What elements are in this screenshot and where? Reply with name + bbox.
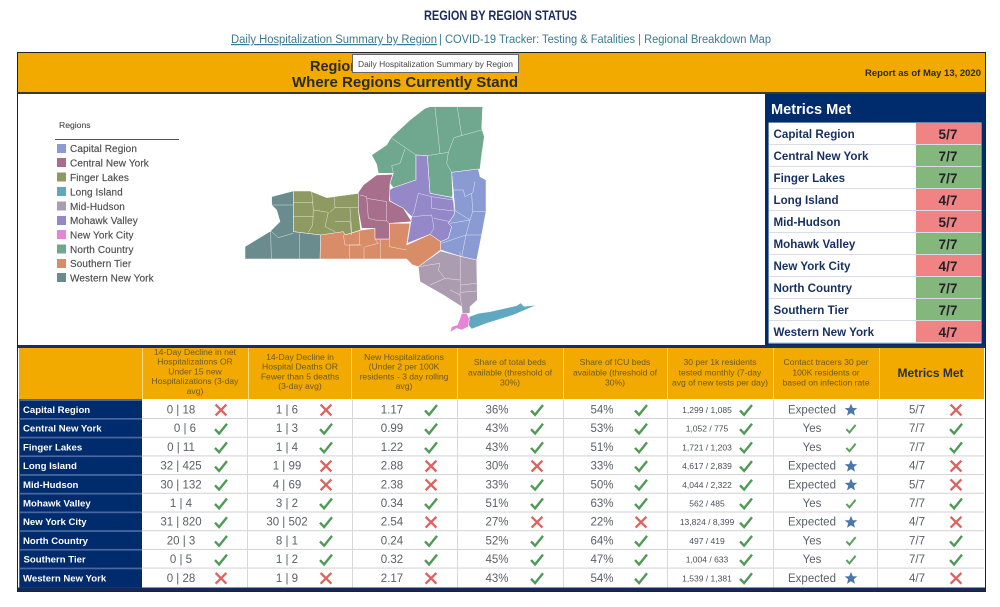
- region: Finger Lakes: [293, 191, 361, 235]
- row: Western New York: 1 | 9: [276, 573, 298, 585]
- row: Capital Region: Capital Region: [774, 128, 855, 141]
- row: Southern Tier: 0.32: [381, 554, 403, 566]
- row: Capital Region: 54%: [590, 404, 614, 416]
- header banner: Region: [310, 59, 359, 75]
- row: Finger Lakes: 43%: [485, 442, 509, 454]
- row: Capital Region: Expected: [788, 404, 836, 416]
- row: New York City: [20, 513, 984, 531]
- panel heading: Metrics Met: [771, 102, 851, 118]
- row: Mid-Hudson: 50%: [590, 479, 614, 491]
- row: Western New York: [769, 321, 981, 342]
- row: Mid-Hudson: 33%: [485, 479, 509, 491]
- panel: metrics met summary: [765, 94, 986, 346]
- row: Capital Region: 1.17: [381, 404, 403, 416]
- row: Finger Lakes: [769, 167, 981, 188]
- row: Mid-Hudson: 4 | 69: [273, 479, 301, 491]
- row: Mohawk Valley: 0.34: [381, 498, 404, 510]
- column heading: total beds: Share of total beds: [474, 357, 546, 367]
- region: Mohawk Valley: [389, 155, 455, 243]
- row: Western New York: [20, 569, 961, 587]
- row: Central New York: [20, 420, 984, 438]
- row: Long Island: 1 | 99: [273, 461, 301, 473]
- region: Long Island: [468, 303, 537, 329]
- legend: North Country: [70, 245, 134, 256]
- row: Mohawk Valley: Mohawk Valley: [23, 498, 91, 510]
- column heading: hospital deaths: Hospital Deaths OR: [262, 362, 338, 372]
- region: New York City: [450, 313, 469, 332]
- table body: [19, 399, 984, 588]
- row: Mid-Hudson: 4,044 / 2,322: [682, 480, 732, 490]
- navigation links: Daily Hospitalization Summary by Region: [231, 32, 437, 46]
- column heading: ICU beds: 30%): [605, 378, 625, 388]
- row: Southern Tier: Yes: [803, 554, 822, 566]
- legend: Southern Tier: [70, 259, 132, 270]
- row: Long Island: 4,617 / 2,839: [682, 461, 732, 471]
- row: Central New York: 7/7: [939, 149, 957, 164]
- row: Mohawk Valley: 1 | 4: [170, 498, 193, 510]
- column heading: ICU beds: available (threshold of: [573, 367, 658, 377]
- row: Finger Lakes: Finger Lakes: [23, 442, 82, 453]
- column heading: new hospitalizations: New Hospitalizations: [364, 352, 444, 362]
- row: Western New York: 4/7: [909, 573, 925, 585]
- row: Southern Tier: 7/7: [939, 303, 957, 318]
- row: North Country: 8 | 1: [276, 535, 298, 547]
- row: New York City: 4/7: [909, 517, 925, 529]
- row: Central New York: Yes: [803, 423, 822, 435]
- navigation links: [231, 32, 771, 46]
- legend: [55, 120, 179, 284]
- row: Western New York: 1,539 / 1,381: [682, 573, 732, 583]
- row: Mid-Hudson: 5/7: [909, 479, 925, 491]
- row: Southern Tier: [769, 299, 981, 320]
- row: Mohawk Valley: [20, 494, 984, 512]
- row: Central New York: 7/7: [909, 423, 925, 435]
- row: Long Island: Expected: [788, 461, 836, 473]
- row: North Country: North Country: [774, 282, 853, 295]
- column heading: hospitalizations decline: Hospitalizations (3-day: [152, 376, 239, 386]
- row: Long Island: [769, 189, 981, 210]
- row: Western New York: 43%: [485, 573, 509, 585]
- row: North Country: [769, 277, 981, 298]
- column heading: new hospitalizations: avg): [396, 381, 412, 391]
- row: Mid-Hudson: Mid-Hudson: [774, 216, 840, 229]
- row: Central New York: [769, 145, 981, 166]
- row: Southern Tier: 7/7: [909, 554, 925, 566]
- row: Long Island: [20, 457, 984, 475]
- legend: Central New York: [70, 158, 150, 170]
- row: Capital Region: [20, 401, 984, 419]
- navigation links: | COVID-19 Tracker: Testing & Fatalities | Regional Breakdown Map: [439, 32, 771, 46]
- tooltip: Daily Hospitalization Summary by Region: [358, 59, 513, 69]
- row: Finger Lakes: 0 | 11: [167, 442, 195, 454]
- row: New York City: 27%: [485, 517, 509, 529]
- row: North Country: 497 / 419: [689, 536, 725, 546]
- row: North Country: North Country: [23, 536, 89, 547]
- row: North Country: Yes: [803, 535, 822, 547]
- row: Mohawk Valley: [769, 233, 981, 254]
- row: Capital Region: Capital Region: [23, 405, 90, 416]
- row: Southern Tier: 1 | 2: [276, 554, 298, 566]
- row: New York City: 30 | 502: [266, 517, 308, 529]
- row: New York City: [769, 255, 981, 276]
- column heading: testing: tested monthly (7-day: [679, 367, 762, 377]
- row: Mohawk Valley: 7/7: [909, 498, 925, 510]
- legend: Long Island: [70, 188, 123, 198]
- column heading: hospital deaths: 14-Day Decline in: [266, 352, 334, 362]
- row: Mohawk Valley: Yes: [803, 498, 822, 510]
- row: Southern Tier: 47%: [590, 554, 614, 566]
- legend: Capital Region: [70, 144, 137, 155]
- column heading: hospitalizations decline: Under 15 new: [168, 366, 223, 376]
- map of New York regions: [245, 107, 537, 332]
- region: Southern Tier: [320, 223, 441, 267]
- row: Southern Tier: Southern Tier: [774, 304, 849, 317]
- column heading: testing: 30 per 1k residents: [683, 357, 757, 367]
- column heading: new hospitalizations: (Under 2 per 100K: [369, 362, 440, 372]
- title: REGION BY REGION STATUS: [424, 7, 577, 23]
- row: Southern Tier: [20, 551, 984, 569]
- row: Long Island: 4/7: [909, 461, 925, 473]
- row: Central New York: 1 | 3: [276, 423, 298, 435]
- column heading: metrics met: Metrics Met: [897, 366, 964, 380]
- legend: Finger Lakes: [70, 173, 129, 184]
- row: Southern Tier: 1,004 / 633: [686, 555, 729, 565]
- row: Capital Region: 36%: [485, 404, 509, 416]
- column heading: testing: avg of new tests per day): [672, 378, 768, 388]
- row: Mid-Hudson: Expected: [788, 479, 836, 491]
- row: New York City: 2.54: [381, 517, 404, 529]
- column heading: hospital deaths: (3-day avg): [278, 381, 322, 391]
- column heading: new hospitalizations: residents - 3 day rolling: [360, 371, 449, 381]
- row: Western New York: 4/7: [939, 325, 957, 340]
- row: Central New York: 53%: [590, 423, 614, 435]
- row: Finger Lakes: 51%: [590, 442, 614, 454]
- row: Central New York: 1,052 / 775: [686, 424, 729, 434]
- row: Capital Region: 0 | 18: [167, 404, 195, 416]
- row: Long Island: 33%: [590, 461, 614, 473]
- row: Capital Region: 5/7: [939, 127, 957, 142]
- column heading: ICU beds: Share of ICU beds: [580, 357, 650, 367]
- row: Southern Tier: Southern Tier: [24, 555, 86, 566]
- region: North Country: [372, 107, 484, 197]
- column heading: hospitalizations decline: 14-Day Decline in net: [154, 347, 237, 357]
- header banner: Report as of May 13, 2020: [865, 68, 981, 78]
- row: Mid-Hudson: [769, 211, 981, 232]
- row: Long Island: 4/7: [939, 193, 957, 208]
- row: Capital Region: [769, 123, 981, 144]
- row: North Country: 7/7: [939, 281, 957, 296]
- row: Mohawk Valley: 7/7: [939, 237, 957, 252]
- legend: Mid-Hudson: [70, 202, 125, 213]
- row: Mid-Hudson: Mid-Hudson: [23, 480, 79, 491]
- row: Finger Lakes: 7/7: [939, 171, 957, 186]
- row: North Country: 52%: [485, 535, 509, 547]
- row: Western New York: Western New York: [23, 573, 107, 584]
- region: Western New York: [245, 191, 321, 259]
- row: Mid-Hudson: 30 | 132: [160, 479, 202, 491]
- column heading: total beds: 30%): [500, 378, 520, 388]
- row: Mohawk Valley: Mohawk Valley: [774, 238, 856, 251]
- row: Long Island: 32 | 425: [160, 461, 202, 473]
- row: Mohawk Valley: 51%: [485, 498, 509, 510]
- row: New York City: Expected: [788, 517, 836, 529]
- row: Central New York: 43%: [485, 423, 509, 435]
- row: Finger Lakes: 1,721 / 1,203: [682, 442, 732, 452]
- row: Mohawk Valley: 3 | 2: [276, 498, 298, 510]
- tooltip: [352, 54, 518, 72]
- row: Southern Tier: 45%: [485, 554, 509, 566]
- row: Capital Region: 1 | 6: [276, 404, 298, 416]
- table header: [19, 347, 984, 399]
- row: Western New York: 54%: [590, 573, 614, 585]
- legend: Regions: [59, 120, 91, 130]
- row: Mid-Hudson: 2.38: [381, 479, 403, 491]
- column heading: hospitalizations decline: Hospitalizations OR: [157, 357, 233, 367]
- row: Central New York: 0.99: [381, 423, 403, 435]
- column heading: contact tracers: 100K residents or: [792, 367, 860, 377]
- legend: Western New York: [70, 274, 155, 284]
- row: Long Island: 30%: [485, 461, 509, 473]
- header banner: [18, 53, 985, 94]
- row: Western New York: Expected: [788, 573, 836, 585]
- row: North Country: 0.24: [381, 535, 404, 547]
- row: Southern Tier: 0 | 5: [170, 554, 192, 566]
- row: Central New York: Central New York: [774, 150, 869, 163]
- row: North Country: 64%: [590, 535, 614, 547]
- row: North Country: [20, 532, 984, 550]
- row: North Country: 7/7: [909, 535, 925, 547]
- legend: New York City: [70, 230, 134, 242]
- row: Mid-Hudson: [20, 476, 984, 494]
- row: Finger Lakes: [20, 438, 984, 456]
- row: Finger Lakes: Yes: [803, 442, 822, 454]
- column heading: hospital deaths: Fewer than 5 deaths: [261, 371, 339, 381]
- row: Finger Lakes: Finger Lakes: [774, 172, 845, 185]
- row: Central New York: 0 | 6: [174, 423, 196, 435]
- row: Capital Region: 5/7: [909, 404, 925, 416]
- row: New York City: 13,824 / 8,399: [680, 517, 734, 527]
- row: Capital Region: 1,299 / 1,085: [682, 405, 732, 415]
- row: New York City: 31 | 820: [160, 517, 202, 529]
- row: Western New York: 0 | 28: [167, 573, 195, 585]
- row: New York City: 4/7: [939, 259, 957, 274]
- row: New York City: New York City: [774, 260, 851, 273]
- row: Central New York: Central New York: [23, 424, 102, 435]
- row: Mohawk Valley: 63%: [590, 498, 614, 510]
- row: New York City: New York City: [23, 517, 87, 528]
- header banner: Where Regions Currently Stand: [292, 75, 518, 91]
- row: Long Island: Long Island: [774, 194, 839, 207]
- column heading: hospitalizations decline: avg): [187, 386, 203, 396]
- row: Mid-Hudson: 5/7: [939, 215, 957, 230]
- row: Long Island: 2.88: [381, 461, 403, 473]
- row: North Country: 20 | 3: [167, 535, 195, 547]
- legend: Mohawk Valley: [70, 216, 138, 227]
- column heading: total beds: available (threshold of: [468, 367, 553, 377]
- row: New York City: 22%: [590, 517, 614, 529]
- region: Capital Region: [441, 169, 486, 260]
- table divider band: [18, 345, 985, 348]
- column heading: contact tracers: based on infection rate: [783, 378, 870, 388]
- row: Finger Lakes: 1.22: [381, 442, 403, 454]
- row: Finger Lakes: 1 | 4: [276, 442, 299, 454]
- row: Finger Lakes: 7/7: [909, 442, 925, 454]
- region: Mid-Hudson: [418, 251, 477, 313]
- row: Mohawk Valley: 562 / 485: [689, 498, 725, 508]
- row: Western New York: 2.17: [381, 573, 403, 585]
- row: Long Island: Long Island: [23, 461, 77, 472]
- region: Central New York: [358, 174, 412, 239]
- table bottom band: [18, 588, 985, 591]
- column heading: contact tracers: Contact tracers 30 per: [783, 357, 869, 367]
- row: Western New York: Western New York: [774, 326, 875, 339]
